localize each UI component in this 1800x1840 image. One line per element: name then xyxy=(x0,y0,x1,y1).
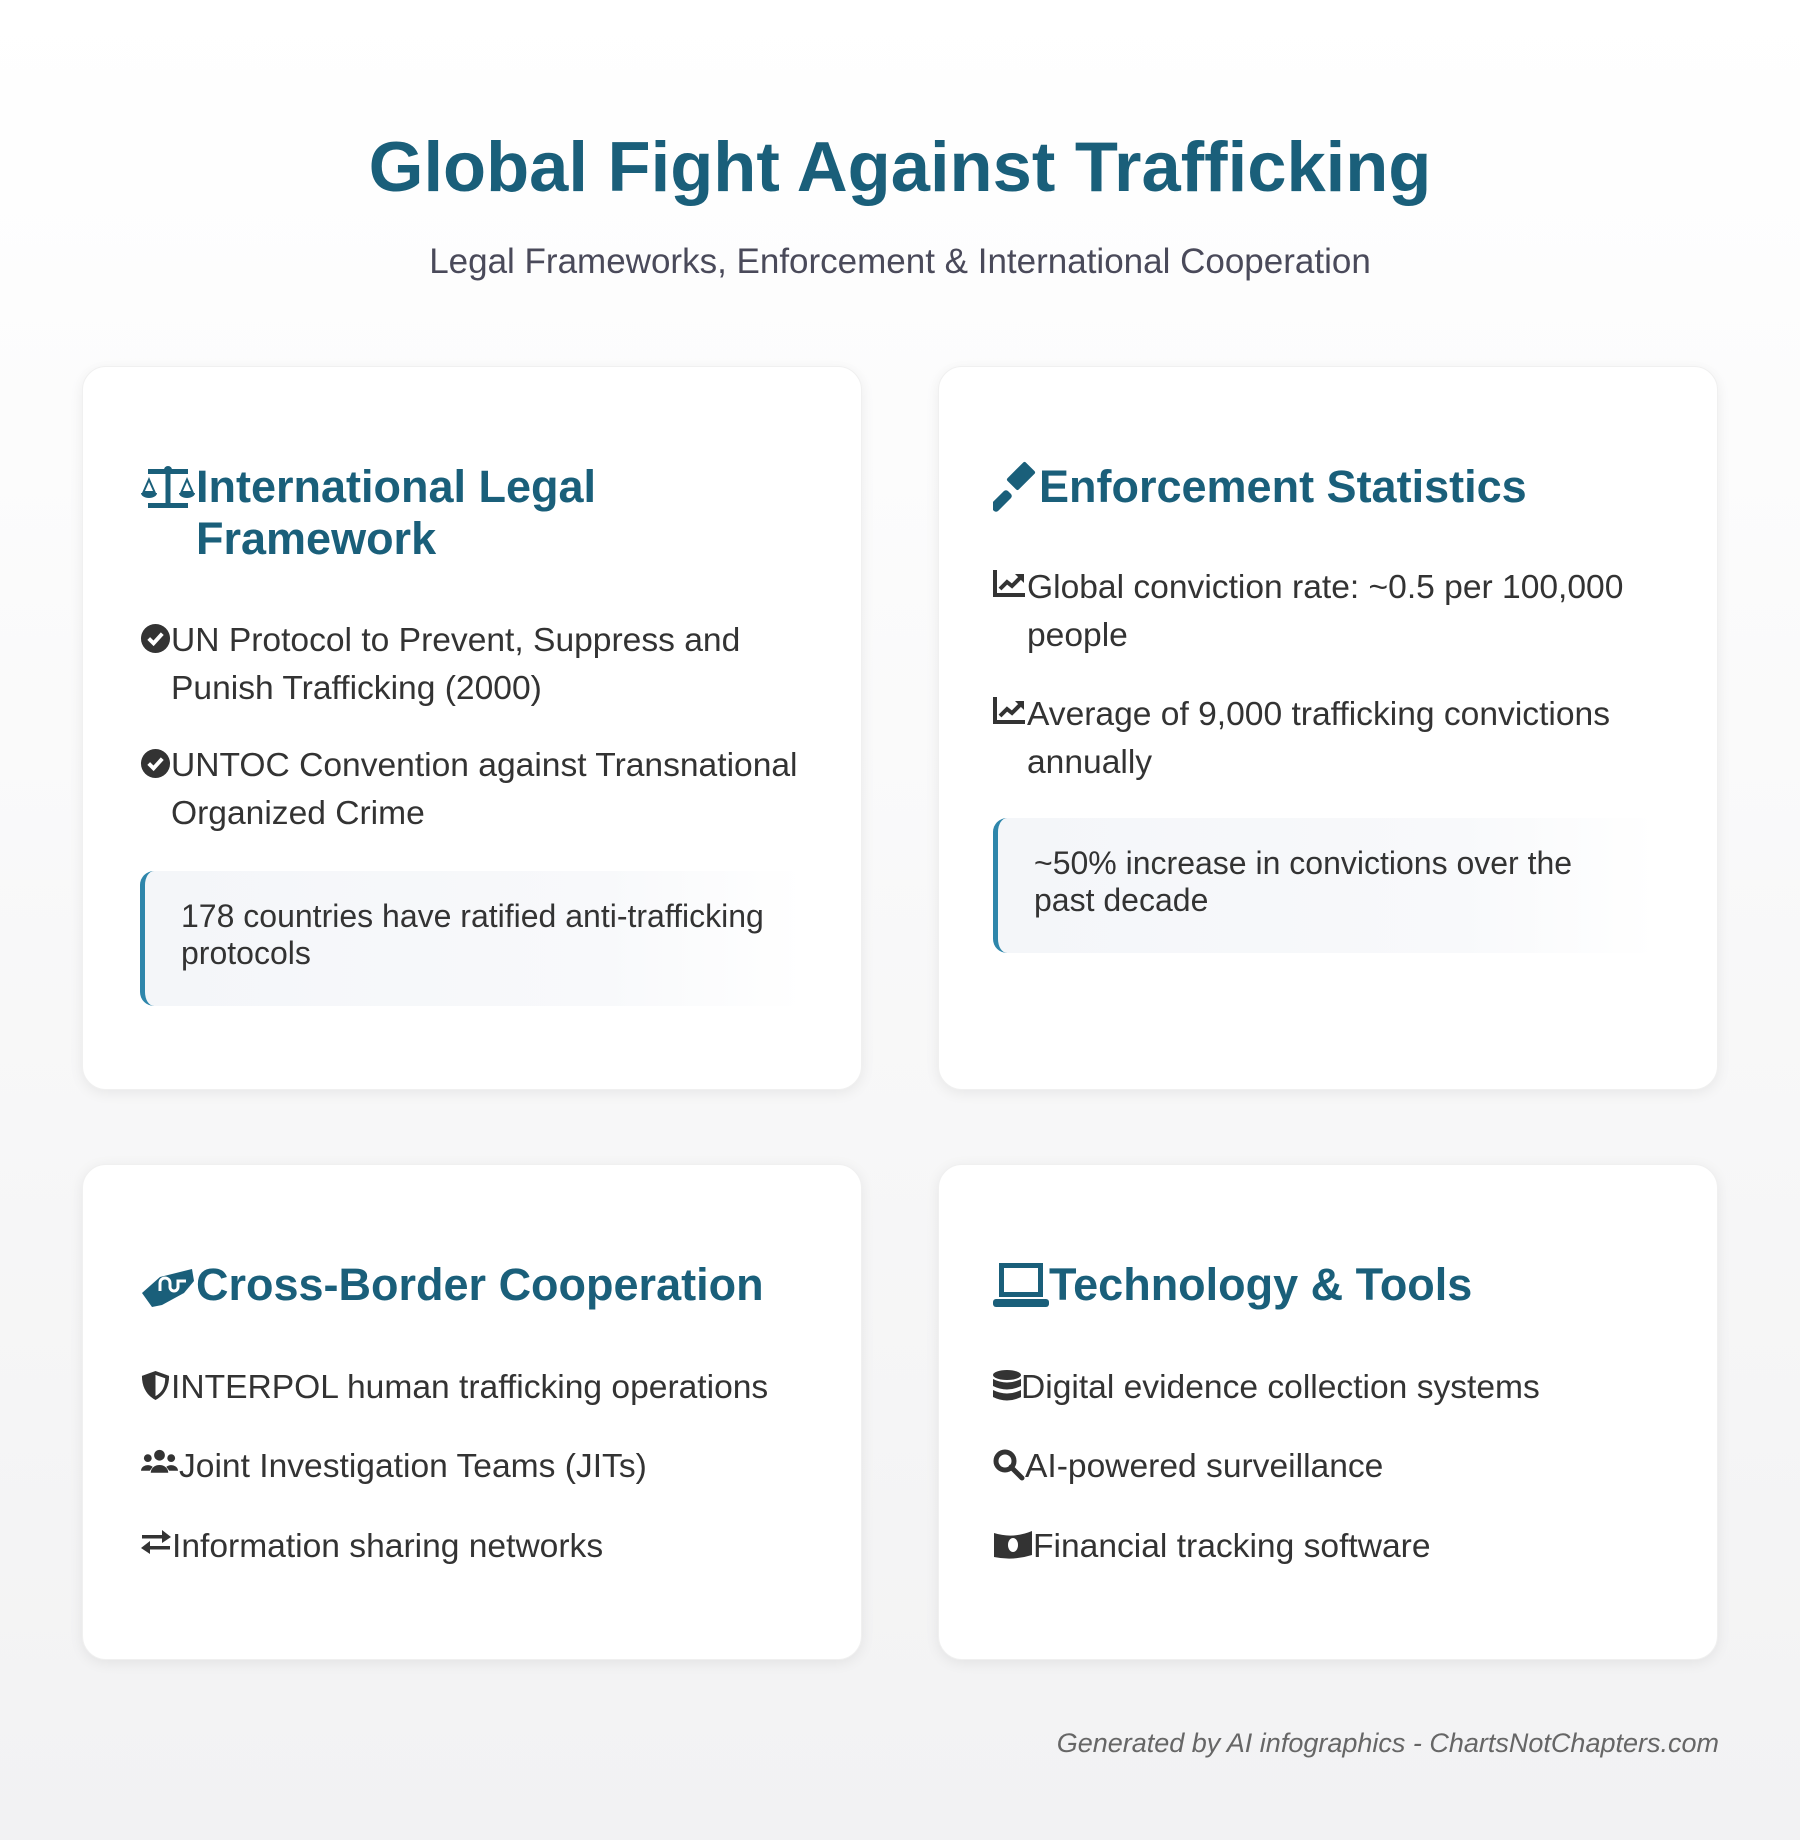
list item: UN Protocol: Punish Trafficking (2000) xyxy=(171,670,542,707)
heading: enforcement statistics: Enforcement Statistics xyxy=(1039,461,1527,512)
title: Global Fight Against Trafficking xyxy=(369,127,1431,206)
list item: UN Protocol xyxy=(141,622,740,707)
list item: conviction rate xyxy=(993,569,1623,654)
list item: digital evidence: Digital evidence collection systems xyxy=(1021,1369,1540,1406)
callout: 178 countries: protocols xyxy=(181,935,311,971)
list item: conviction rate: people xyxy=(1027,617,1128,654)
heading: international legal framework: International Legal xyxy=(196,461,596,512)
list item: UN Protocol: UN Protocol to Prevent, Suppress and xyxy=(171,622,740,659)
list item: UNTOC: UNTOC Convention against Transnational xyxy=(171,747,798,784)
panel: enforcement statistics xyxy=(938,366,1718,1090)
list item: UNTOC: Organized Crime xyxy=(171,795,425,832)
list item: AI surveillance: AI-powered surveillance xyxy=(1025,1448,1383,1485)
heading: international legal framework: Framework xyxy=(196,513,436,564)
panel: international legal framework xyxy=(82,366,862,1090)
heading: international legal framework xyxy=(141,461,596,564)
list item: UNTOC xyxy=(140,747,798,832)
panel: technology & tools xyxy=(938,1164,1718,1660)
callout: 50% increase xyxy=(993,818,1657,953)
panel: cross-border cooperation xyxy=(82,1164,862,1660)
list item: average convictions xyxy=(993,696,1610,781)
callout: 178 countries xyxy=(140,871,804,1006)
list item: information sharing: Information sharing networks xyxy=(172,1528,603,1565)
list item: INTERPOL: INTERPOL human trafficking operations xyxy=(171,1369,768,1406)
footer: Generated by AI infographics - ChartsNotChapters.com xyxy=(1057,1728,1719,1758)
subtitle: Legal Frameworks, Enforcement & International Cooperation xyxy=(429,242,1371,281)
list item: financial tracking: Financial tracking software xyxy=(1033,1528,1431,1565)
list item: JITs: Joint Investigation Teams (JITs) xyxy=(179,1448,647,1485)
callout: 50% increase: ~50% increase in convictions over the xyxy=(1034,845,1572,881)
heading: technology & tools: Technology & Tools xyxy=(1049,1259,1472,1310)
callout: 50% increase: past decade xyxy=(1034,882,1208,918)
heading: cross-border cooperation: Cross-Border Cooperation xyxy=(196,1259,764,1310)
list item: average convictions: annually xyxy=(1027,744,1152,781)
list item: average convictions: Average of 9,000 trafficking convictions xyxy=(1027,696,1610,733)
list item: conviction rate: Global conviction rate: ~0.5 per 100,000 xyxy=(1027,569,1623,606)
callout: 178 countries: 178 countries have ratified anti-trafficking xyxy=(181,898,764,934)
